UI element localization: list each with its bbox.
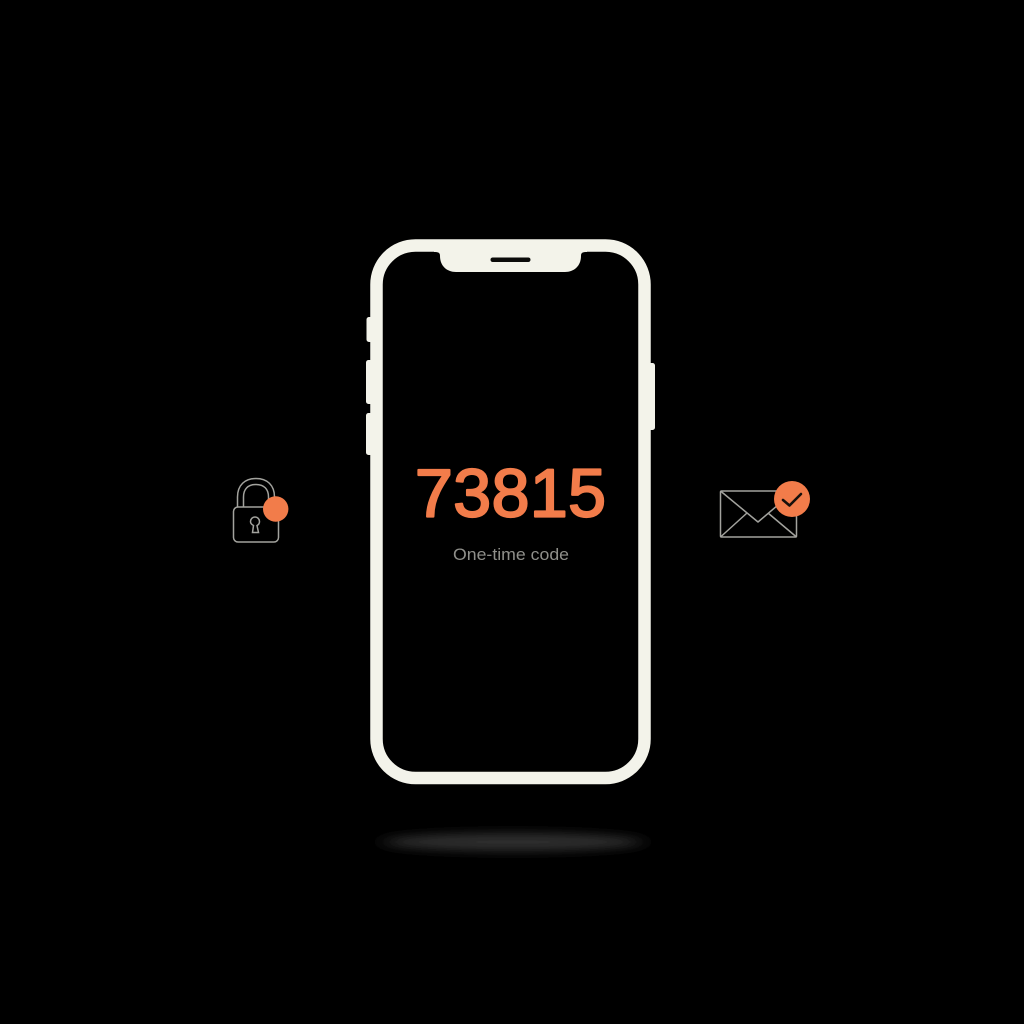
padlock shackle	[238, 478, 274, 507]
icon: padlock	[234, 478, 288, 542]
side button: left upper	[366, 317, 376, 342]
check badge	[774, 481, 810, 517]
phone	[366, 245, 655, 778]
envelope	[720, 491, 796, 537]
floor shadow	[383, 833, 643, 851]
one-time code number: 73815	[415, 456, 606, 532]
keyhole	[250, 517, 260, 532]
side button: right	[645, 363, 655, 430]
icon: envelope with check badge	[720, 481, 810, 537]
notch	[434, 245, 587, 272]
padlock body	[234, 507, 278, 542]
one-time code label: One-time code	[453, 545, 569, 564]
side button: left middle	[366, 360, 376, 404]
side button: left lower	[366, 413, 376, 455]
phone frame	[376, 246, 644, 778]
speaker slot	[490, 258, 530, 262]
notification dot	[263, 496, 288, 522]
